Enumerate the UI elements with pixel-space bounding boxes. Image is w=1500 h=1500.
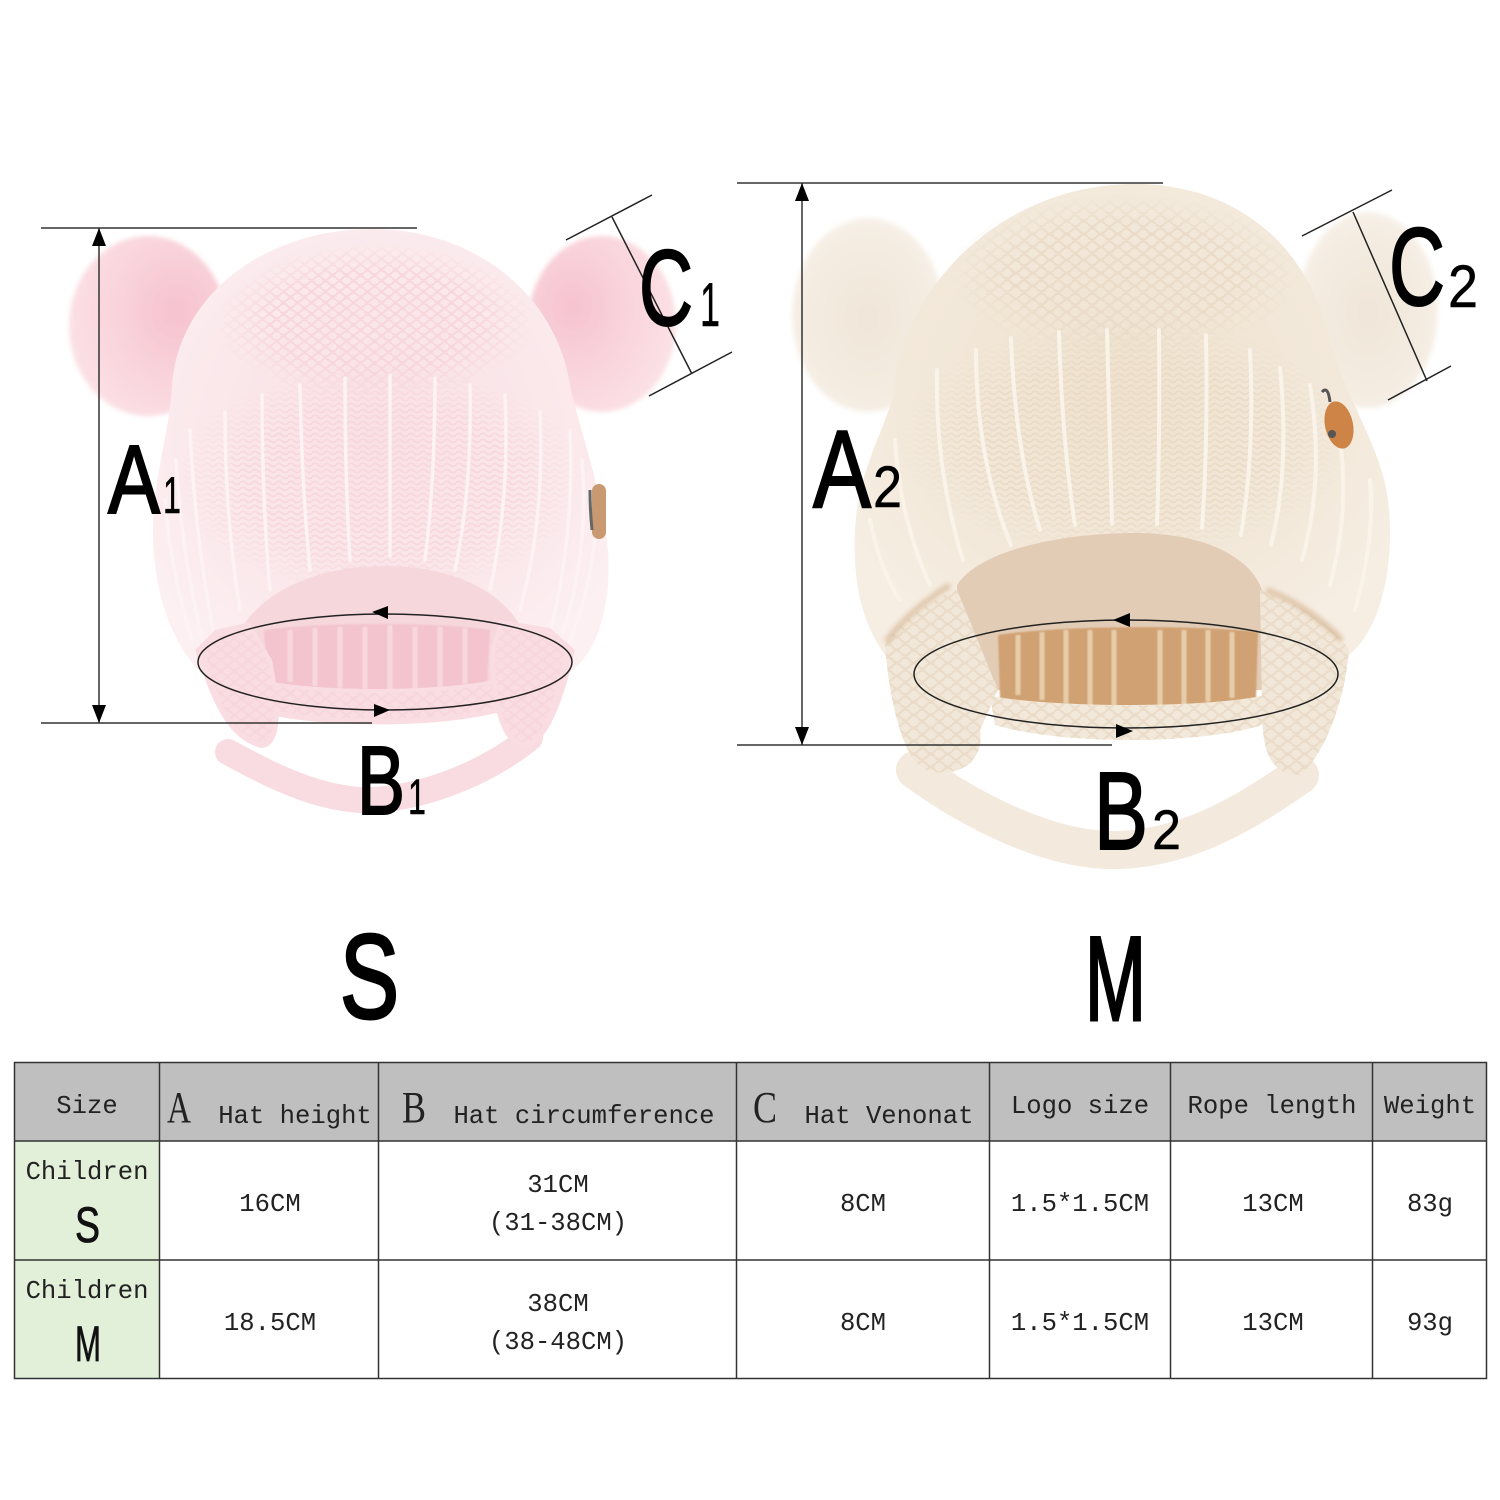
size heading: M: M — [1085, 912, 1146, 1046]
cream logo tag — [1320, 390, 1358, 451]
pink opening — [232, 566, 532, 690]
cream lower band — [990, 696, 1262, 740]
table header row: Rope length — [1188, 1092, 1356, 1121]
size table — [14, 1062, 1487, 1379]
cream inner band — [998, 627, 1258, 709]
pink flap knit overlay — [205, 628, 565, 742]
pink crown knit — [240, 256, 509, 383]
table row: Children M: 1.5*1.5CM — [1011, 1309, 1149, 1338]
label: A2: 2 — [873, 455, 902, 520]
cream hat body — [855, 184, 1390, 655]
table grid — [14, 1062, 1487, 1379]
table row: Children S: 16CM — [239, 1190, 301, 1219]
label: B2: 2 — [1152, 798, 1181, 861]
table row: Children S: 31CM — [527, 1171, 589, 1200]
cream strap — [915, 770, 1300, 850]
table row: Children S: 83g — [1407, 1190, 1453, 1219]
pink inner band — [264, 624, 490, 692]
cream right pom-pom — [1298, 212, 1438, 408]
table backgrounds — [14, 1062, 1487, 1379]
pink cuff knit — [208, 393, 554, 569]
pink left pom-pom — [69, 236, 227, 416]
B1 circumference ellipse — [198, 606, 572, 717]
table row: Children S: S — [75, 1197, 100, 1253]
pink inner band ribs — [290, 625, 465, 690]
table row: Children M: 93g — [1407, 1309, 1453, 1338]
table header row: Hat Venonat — [805, 1102, 973, 1131]
table row: Children M: Children — [26, 1277, 148, 1306]
label: A1: 1 — [163, 467, 181, 525]
C2 width dimension — [1302, 190, 1451, 400]
table row: Children S: 8CM — [840, 1190, 886, 1219]
C1 width dimension — [566, 195, 732, 396]
table row: Children M: M — [75, 1316, 101, 1372]
table row: Children M — [26, 1277, 1453, 1372]
table row: Children M: 38CM — [527, 1290, 589, 1319]
cream cuff knit — [932, 352, 1319, 537]
table header row: Logo size — [1011, 1092, 1149, 1121]
label: C2: C — [1389, 206, 1445, 329]
dimension lines: size S — [41, 195, 732, 723]
table header row: C — [753, 1083, 777, 1132]
label: B2: B — [1094, 750, 1148, 873]
label: A1: A — [108, 425, 160, 534]
table header row: B — [402, 1083, 426, 1132]
table row: Children S — [26, 1158, 1453, 1253]
table header row: Hat height — [218, 1102, 372, 1131]
label: C2: 2 — [1448, 253, 1478, 320]
table header row — [56, 1083, 1476, 1132]
dimension lines: size M — [737, 183, 1451, 745]
hat photo: size M cream — [792, 184, 1438, 850]
cream left pom-pom — [792, 218, 944, 412]
table row: Children M: 8CM — [840, 1309, 886, 1338]
table row: Children M: (38-48CM) — [489, 1328, 627, 1357]
cream ribs — [870, 330, 1371, 610]
cream crown knit — [977, 207, 1273, 332]
label: B1: B — [357, 726, 405, 835]
cream ear flaps — [885, 590, 1349, 775]
table row: Children S: Children — [26, 1158, 148, 1187]
table row: Children M: 18.5CM — [224, 1309, 316, 1338]
pink ear flaps — [195, 620, 575, 748]
table header row: Hat circumference — [453, 1102, 715, 1131]
cream flap shading — [886, 585, 1342, 642]
pink lower band — [262, 680, 500, 724]
pink strap — [228, 738, 530, 800]
A2 height dimension — [737, 183, 1163, 745]
table row: Children S: 1.5*1.5CM — [1011, 1190, 1149, 1219]
B2 circumference ellipse — [914, 613, 1338, 738]
cream opening — [957, 533, 1262, 690]
table row: Children M: 13CM — [1242, 1309, 1304, 1338]
table row: Children S: (31-38CM) — [489, 1209, 627, 1238]
pink right pom-pom — [528, 236, 676, 412]
label: A2: A — [813, 408, 871, 531]
pink hat body — [153, 229, 609, 672]
table row: Children S: 13CM — [1242, 1190, 1304, 1219]
size heading: S: S — [340, 910, 399, 1044]
table header row: Weight — [1384, 1092, 1476, 1121]
A1 height dimension — [41, 228, 417, 723]
label: C1: 1 — [700, 271, 720, 340]
label: B1: 1 — [408, 769, 426, 825]
pink ribs — [165, 375, 596, 650]
table header row: A — [167, 1083, 191, 1132]
hat photo: size S pink — [69, 229, 676, 800]
table header row: Size — [56, 1092, 118, 1121]
label: C1: C — [639, 227, 693, 348]
pink logo tag — [590, 484, 606, 539]
